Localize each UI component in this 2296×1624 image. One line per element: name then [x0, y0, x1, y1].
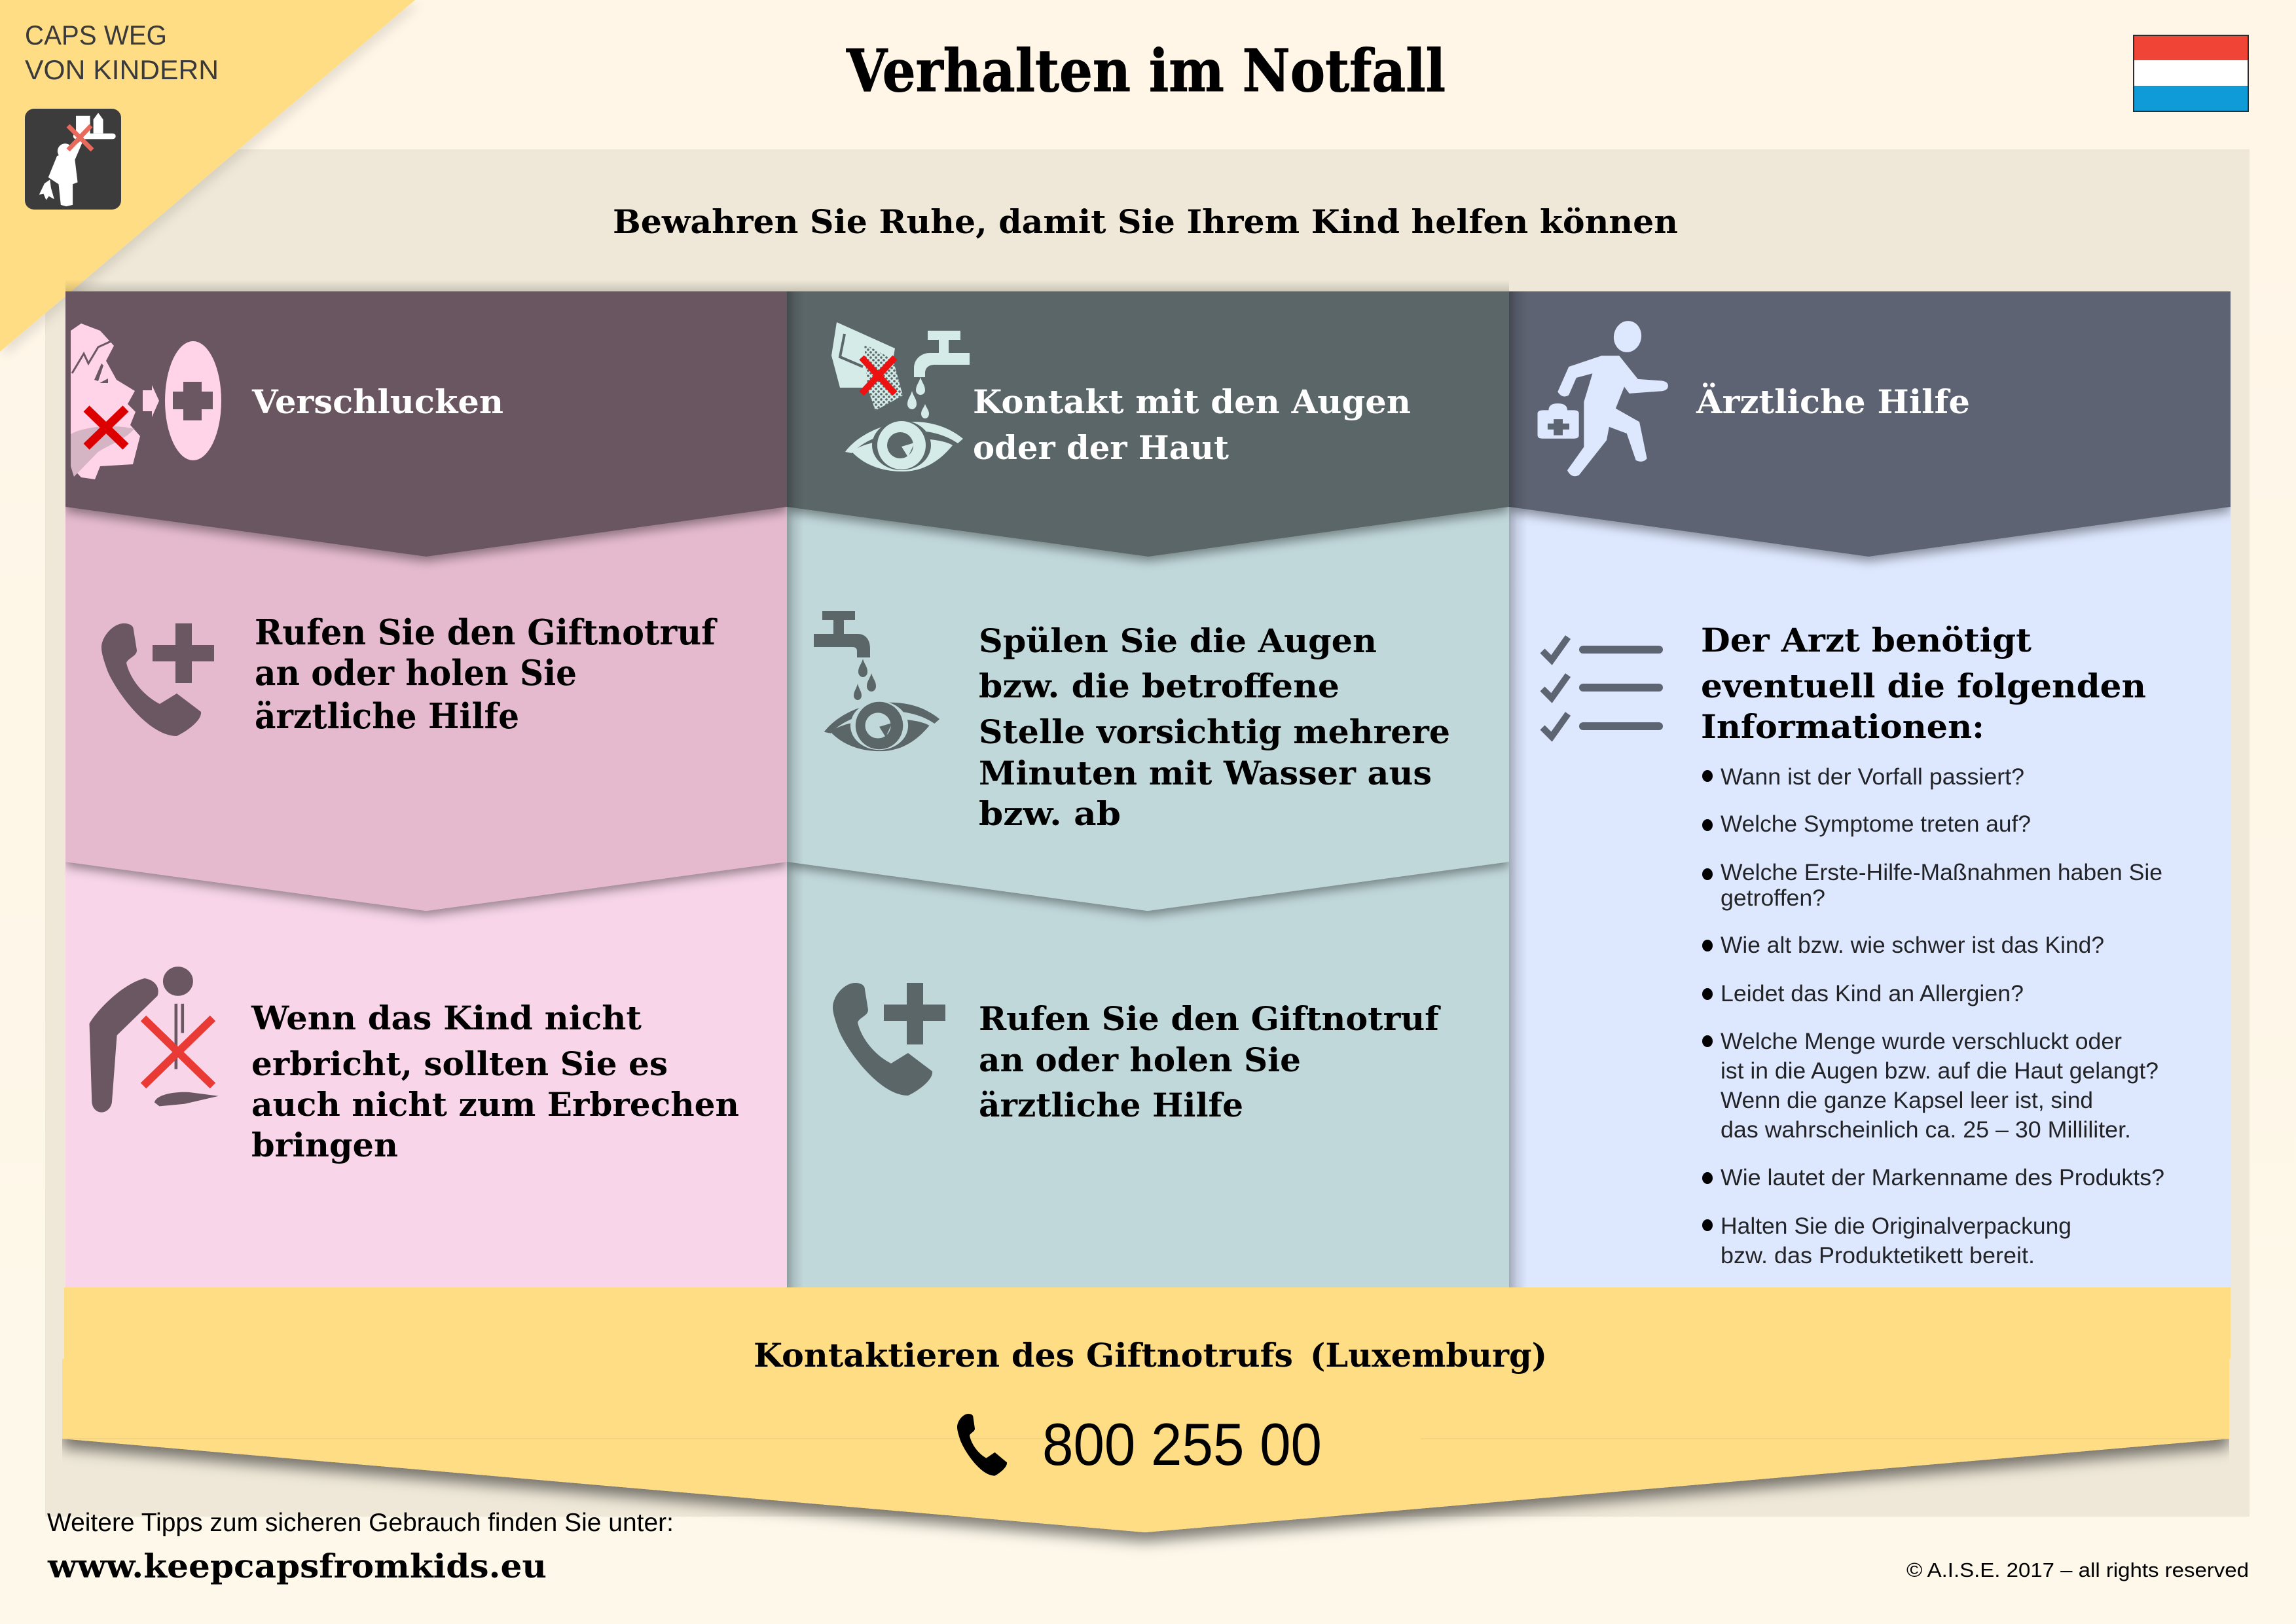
icon: phone with plus	[833, 983, 945, 1096]
list: information for the doctor	[1702, 764, 2164, 1268]
panel: medical help column	[1509, 291, 2231, 1287]
text: call poison centre: an oder holen Sie	[255, 653, 577, 693]
brand text: caps weg von kindern: VON KINDERN	[25, 54, 219, 85]
yellow corner triangle	[0, 0, 415, 352]
list: information for the doctor: Leidet das Kind an Allergien?	[1721, 981, 2024, 1006]
icon: vomiting figure crossed out	[89, 967, 219, 1113]
panel: poison centre contact band	[62, 1287, 2231, 1532]
title: Verhalten im Notfall	[846, 36, 1446, 105]
heading: kontakt mit den augen: Kontakt mit den Augen	[973, 382, 1411, 421]
list: information for the doctor: Wie alt bzw. wie schwer ist das Kind?	[1721, 932, 2104, 958]
heading: the doctor may need: Informationen:	[1701, 707, 1984, 746]
text: rinse instructions: bzw. ab	[979, 794, 1121, 833]
step: do not induce vomiting	[89, 967, 739, 1164]
list: information for the doctor: getroffen?	[1721, 885, 1825, 911]
text: call poison centre: Rufen Sie den Giftnotruf	[255, 612, 718, 653]
footer: more tips text: Weitere Tipps zum sicheren Gebrauch finden Sie unter:	[47, 1509, 674, 1537]
icon: child reaching shelf	[25, 109, 121, 210]
text: do not induce vomiting	[251, 999, 739, 1164]
column top shadow	[65, 280, 1509, 291]
list: information for the doctor: Wenn die ganze Kapsel leer ist, sind	[1721, 1088, 2093, 1113]
footer: website url: www.keepcapsfromkids.eu	[47, 1547, 547, 1585]
icon: phone with plus	[101, 623, 214, 736]
icon: telephone	[957, 1414, 1007, 1476]
heading: the doctor may need	[1701, 621, 2146, 746]
list: information for the doctor: Welche Menge wurde verschluckt oder	[1721, 1029, 2122, 1054]
text: rinse instructions: Stelle vorsichtig mehrere	[979, 712, 1450, 751]
text: call poison centre: ärztliche Hilfe	[255, 696, 519, 737]
list: information for the doctor: Halten Sie die Originalverpackung	[1721, 1213, 2071, 1239]
icon: checklist	[1542, 637, 1663, 737]
heading: aerztliche hilfe: Ärztliche Hilfe	[1696, 382, 1970, 421]
heading: the doctor may need: Der Arzt benötigt	[1701, 621, 2032, 659]
heading: contact poison centre	[754, 1336, 1547, 1375]
text: rinse instructions: bzw. die betroffene	[979, 667, 1339, 705]
list: information for the doctor: ist in die Augen bzw. auf die Haut gelangt?	[1721, 1058, 2159, 1084]
brand text: caps weg von kindern: CAPS WEG	[25, 20, 167, 50]
text: rinse instructions	[979, 621, 1450, 833]
text: call poison centre: an oder holen Sie	[979, 1041, 1301, 1079]
text: rinse instructions: Minuten mit Wasser aus	[979, 754, 1432, 792]
subtitle: Bewahren Sie Ruhe, damit Sie Ihrem Kind helfen können	[613, 202, 1678, 241]
footer: copyright: © A.I.S.E. 2017 – all rights reserved	[1906, 1559, 2249, 1581]
icon: tap over eye	[814, 611, 939, 751]
heading: contact poison centre: (Luxemburg)	[1310, 1336, 1547, 1375]
text: call poison centre: ärztliche Hilfe	[979, 1086, 1243, 1124]
list: information for the doctor: bzw. das Produktetikett bereit.	[1721, 1243, 2035, 1268]
text: do not induce vomiting: bringen	[251, 1126, 398, 1164]
text: do not induce vomiting: auch nicht zum Erbrechen	[251, 1085, 739, 1124]
text: call poison centre	[255, 612, 718, 737]
step: rinse with water	[814, 611, 1450, 833]
icon: running person with first aid kit	[1538, 319, 1668, 476]
list: information for the doctor: Wie lautet der Markenname des Produkts?	[1721, 1165, 2164, 1190]
step: call poison centre (pink)	[65, 507, 787, 922]
text: do not induce vomiting: erbricht, sollten Sie es	[251, 1044, 668, 1083]
heading: the doctor may need: eventuell die folgenden	[1701, 667, 2146, 705]
heading: kontakt mit den augen: oder der Haut	[973, 428, 1229, 467]
list: information for the doctor: Welche Symptome treten auf?	[1721, 811, 2031, 837]
heading: verschlucken: Verschlucken	[251, 382, 503, 421]
heading: kontakt mit den augen	[973, 382, 1411, 467]
step: call poison centre (teal)	[833, 983, 1442, 1124]
panel: verschlucken column	[65, 291, 787, 1287]
text: call poison centre: Rufen Sie den Giftnotruf	[979, 999, 1442, 1038]
header: verschlucken	[65, 291, 787, 557]
brand text: caps weg von kindern	[25, 20, 219, 85]
list: information for the doctor: Wann ist der Vorfall passiert?	[1721, 764, 2024, 790]
phone number: 800 255 00	[1042, 1412, 1322, 1478]
list: information for the doctor: das wahrscheinlich ca. 25 – 30 Milliliter.	[1721, 1117, 2131, 1143]
panel: eye and skin contact column	[787, 291, 1509, 1287]
heading: contact poison centre: Kontaktieren des Giftnotrufs	[754, 1336, 1293, 1375]
list: information for the doctor: Welche Erste-Hilfe-Maßnahmen haben Sie	[1721, 860, 2162, 885]
icon: luxembourg flag	[2134, 35, 2248, 111]
icon: mouth with no-swallow cross and medical cross	[71, 323, 221, 479]
text: rinse instructions: Spülen Sie die Augen	[979, 621, 1377, 660]
text: call poison centre	[979, 999, 1442, 1124]
text: do not induce vomiting: Wenn das Kind nicht	[251, 999, 642, 1037]
header icon: capsule, tap and eye	[831, 322, 970, 471]
